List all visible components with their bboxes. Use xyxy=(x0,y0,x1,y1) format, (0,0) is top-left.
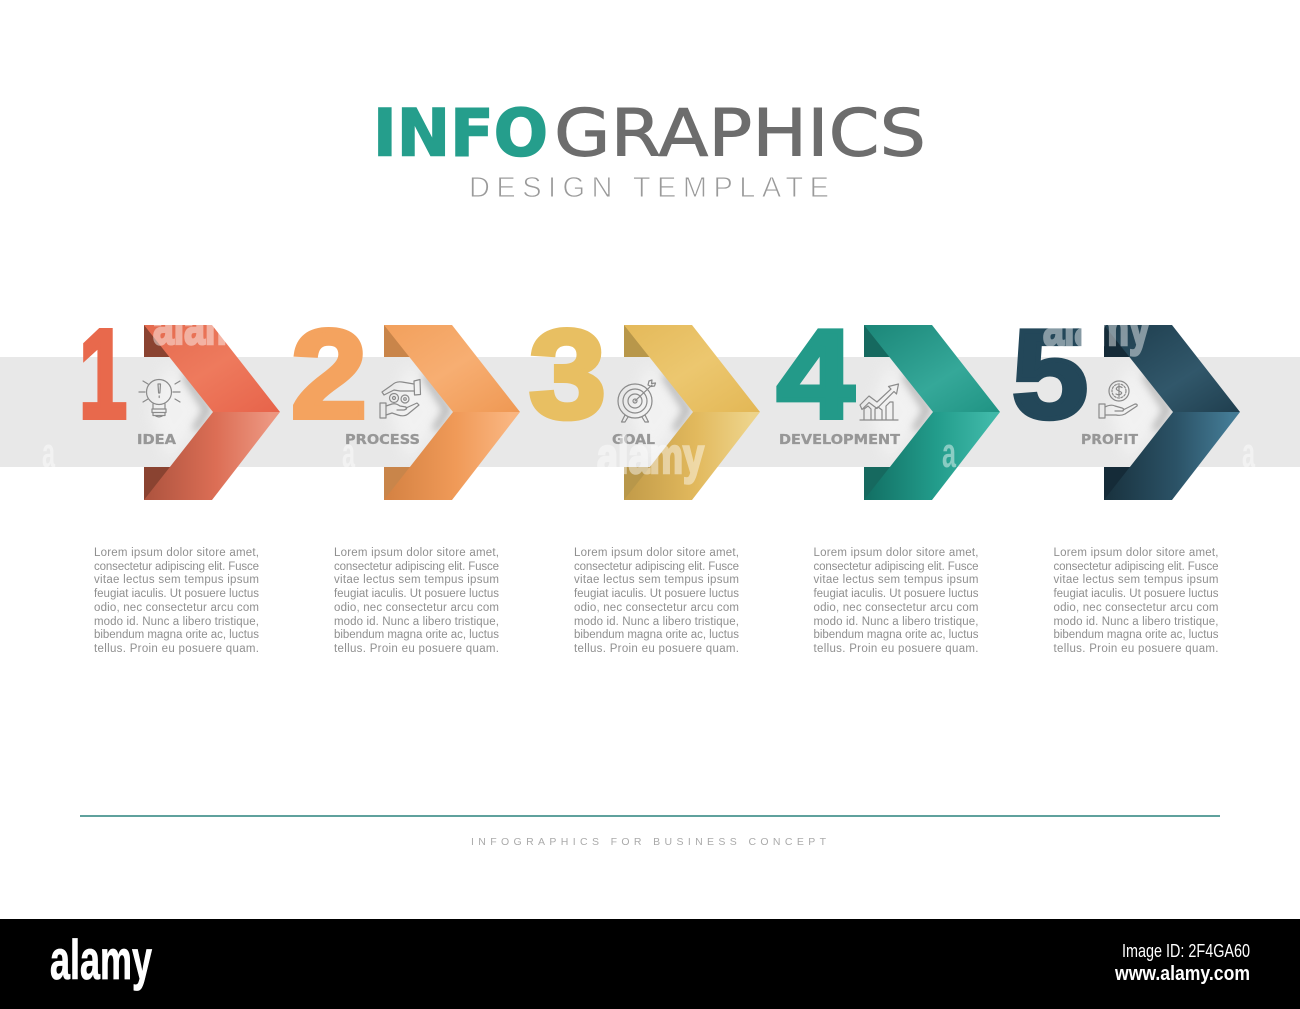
icon: hands and gears xyxy=(380,380,420,418)
icon: hand with coin xyxy=(1099,381,1137,418)
text block 5: vitae lectus sem tempus ipsum xyxy=(1054,574,1218,586)
text block 2: vitae lectus sem tempus ipsum xyxy=(334,574,499,586)
text block 4: Lorem ipsum dolor sitore amet, xyxy=(814,547,978,559)
title: INFO xyxy=(373,96,548,172)
text block 4: feugiat iaculis. Ut posuere luctus xyxy=(814,588,979,600)
step 2: process xyxy=(293,325,520,500)
text block 3: Lorem ipsum dolor sitore amet, xyxy=(574,547,739,559)
text block 3 xyxy=(574,547,739,655)
text block 2 xyxy=(334,547,499,655)
text block 5: Lorem ipsum dolor sitore amet, xyxy=(1054,547,1218,559)
text block 1 xyxy=(94,547,259,655)
watermarks: a xyxy=(42,429,55,476)
text block 5 xyxy=(1054,547,1219,655)
black watermark bar xyxy=(0,919,1300,1009)
website: www.alamy.com xyxy=(1114,963,1250,985)
text block 1: tellus. Proin eu posuere quam. xyxy=(94,643,259,655)
text block 3: modo id. Nunc a libero tristique, xyxy=(574,616,739,628)
notch shadow 3 xyxy=(638,374,692,442)
text block 4: bibendum magna orite ac, luctus xyxy=(814,629,979,641)
alamy logo: alamy xyxy=(50,928,152,991)
icon: growth chart xyxy=(860,384,898,420)
label: process: PROCESS xyxy=(345,432,420,448)
number 3: 3 xyxy=(529,304,606,444)
grey band xyxy=(0,357,1300,467)
text block 2: modo id. Nunc a libero tristique, xyxy=(334,616,499,628)
arrow 4 xyxy=(864,325,1000,500)
label: profit: PROFIT xyxy=(1081,432,1139,448)
step 3: goal xyxy=(529,325,760,500)
text block 1: Lorem ipsum dolor sitore amet, xyxy=(94,547,259,559)
notch shadow 2 xyxy=(398,374,452,442)
text block 3: tellus. Proin eu posuere quam. xyxy=(574,643,739,655)
text block 5: odio, nec consectetur arcu com xyxy=(1054,602,1218,614)
number 2: 2 xyxy=(291,304,367,444)
watermarks: alamy xyxy=(153,299,259,355)
text block 1: vitae lectus sem tempus ipsum xyxy=(94,574,259,586)
text block 4: modo id. Nunc a libero tristique, xyxy=(814,616,978,628)
text block 4: odio, nec consectetur arcu com xyxy=(814,602,978,614)
text block 2: odio, nec consectetur arcu com xyxy=(334,602,499,614)
text block 4: vitae lectus sem tempus ipsum xyxy=(814,574,978,586)
notch shadow 1 xyxy=(158,374,212,444)
text block 1: modo id. Nunc a libero tristique, xyxy=(94,616,259,628)
notch shadow 5 xyxy=(1118,374,1172,442)
arrow 1 xyxy=(144,325,280,500)
text block 5: tellus. Proin eu posuere quam. xyxy=(1054,643,1218,655)
text block 3: feugiat iaculis. Ut posuere luctus xyxy=(574,588,739,600)
text block 5: modo id. Nunc a libero tristique, xyxy=(1054,616,1218,628)
icon: target xyxy=(618,380,656,422)
watermarks: a xyxy=(1242,429,1255,476)
image id: Image ID: 2F4GA60 xyxy=(1122,941,1250,961)
step 1: idea xyxy=(82,325,280,500)
text block 1: bibendum magna orite ac, luctus xyxy=(94,629,259,641)
notch shadow 4 xyxy=(878,374,932,444)
text block 4: consectetur adipiscing elit. Fusce xyxy=(814,561,978,573)
watermarks: alamy xyxy=(597,428,704,484)
text block 5: feugiat iaculis. Ut posuere luctus xyxy=(1054,588,1219,600)
arrow 5 xyxy=(1104,325,1240,500)
watermarks: a xyxy=(942,429,956,476)
watermarks: alamy xyxy=(1043,300,1150,356)
watermarks xyxy=(42,299,1255,484)
text block 2: tellus. Proin eu posuere quam. xyxy=(334,643,499,655)
title: GRAPHICS xyxy=(554,96,926,172)
text block 2: bibendum magna orite ac, luctus xyxy=(334,629,499,641)
step 4: development xyxy=(776,325,1000,500)
title xyxy=(373,96,926,172)
label: goal: GOAL xyxy=(612,432,655,448)
text block 2: Lorem ipsum dolor sitore amet, xyxy=(334,547,499,559)
text block 5: bibendum magna orite ac, luctus xyxy=(1054,629,1219,641)
icon: light bulb xyxy=(139,380,180,417)
text block 2: feugiat iaculis. Ut posuere luctus xyxy=(334,588,499,600)
text block 3: vitae lectus sem tempus ipsum xyxy=(574,574,739,586)
text block 3: consectetur adipiscing elit. Fusce xyxy=(574,561,739,573)
arrow 2 xyxy=(384,325,520,500)
text block 2: consectetur adipiscing elit. Fusce xyxy=(334,561,499,573)
text block 4 xyxy=(814,547,979,655)
text block 1: consectetur adipiscing elit. Fusce xyxy=(94,561,259,573)
step 5: profit xyxy=(1013,325,1240,500)
text block 1: feugiat iaculis. Ut posuere luctus xyxy=(94,588,259,600)
text block 5: consectetur adipiscing elit. Fusce xyxy=(1054,561,1218,573)
text block 3: bibendum magna orite ac, luctus xyxy=(574,629,739,641)
arrow 3 xyxy=(624,325,760,500)
number 1: 1 xyxy=(79,304,127,444)
label: development: DEVELOPMENT xyxy=(779,432,901,448)
footer caption: INFOGRAPHICS FOR BUSINESS CONCEPT xyxy=(471,836,827,848)
number 5: 5 xyxy=(1012,304,1088,444)
text block 1: odio, nec consectetur arcu com xyxy=(94,602,259,614)
text block 4: tellus. Proin eu posuere quam. xyxy=(814,643,978,655)
footer rule xyxy=(80,815,1220,817)
number 4: 4 xyxy=(777,304,854,444)
label: idea: IDEA xyxy=(137,432,177,448)
subtitle: DESIGN TEMPLATE xyxy=(469,172,829,204)
text block 3: odio, nec consectetur arcu com xyxy=(574,602,739,614)
watermarks: a xyxy=(342,429,355,476)
